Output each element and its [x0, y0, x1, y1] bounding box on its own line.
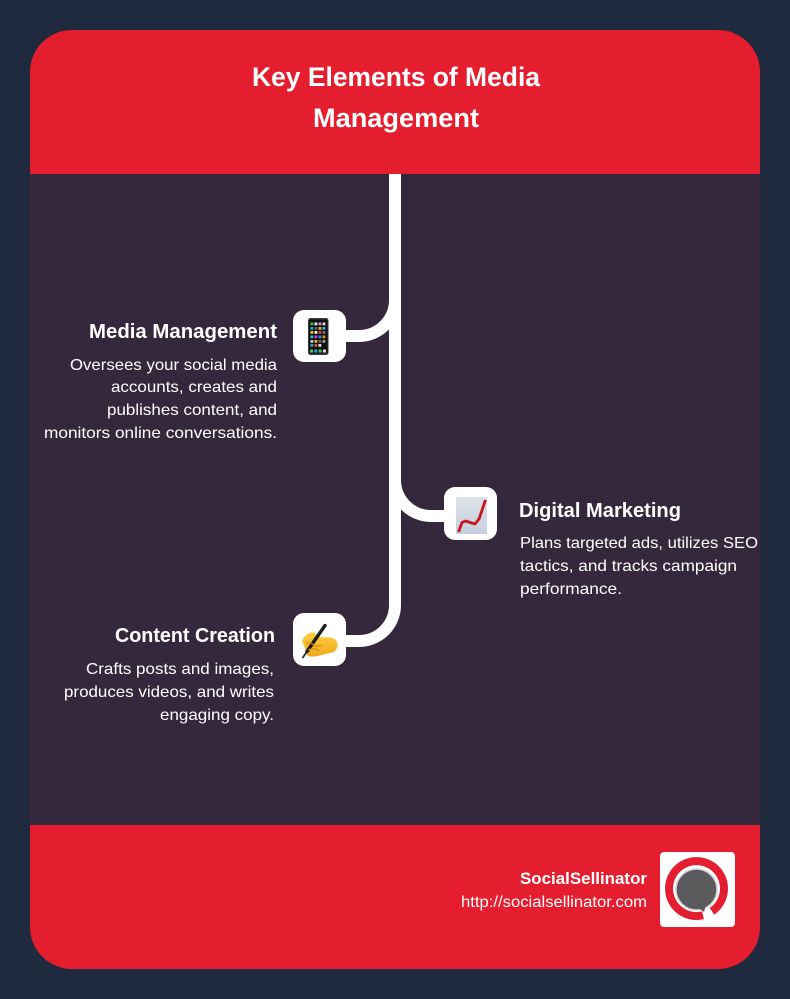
icon: line chart — [444, 487, 497, 540]
timeline connector — [340, 174, 450, 641]
title: Management — [313, 103, 479, 133]
text: Media Management description: monitors online conversations. — [44, 425, 277, 442]
title: Key Elements of Media — [252, 62, 541, 92]
text: Content Creation description — [64, 661, 274, 724]
text: Media Management description: Oversees your social media — [70, 357, 277, 374]
text: Digital Marketing description — [520, 535, 758, 598]
footer brand text: SocialSellinator — [520, 869, 647, 888]
icon: SocialSellinator logo — [660, 852, 735, 927]
text: Digital Marketing description: Plans targeted ads, utilizes SEO — [520, 535, 758, 552]
footer brand text: http://socialsellinator.com — [461, 894, 647, 911]
text: Content Creation description: Crafts posts and images, — [86, 661, 274, 678]
icon: writing hand — [293, 613, 346, 666]
panel: header band — [30, 30, 760, 174]
text: Content Creation description: engaging copy. — [160, 707, 274, 724]
text: Content Creation description: produces videos, and writes — [64, 684, 274, 701]
text: Media Management description: publishes content, and — [107, 402, 277, 419]
heading: Digital Marketing: Digital Marketing — [519, 500, 681, 522]
text: Media Management description: accounts, creates and — [111, 379, 277, 396]
text: Digital Marketing description: performance. — [520, 581, 622, 598]
icon: smartphone — [293, 310, 346, 362]
text: Digital Marketing description: tactics, and tracks campaign — [520, 558, 737, 575]
text: Media Management description — [44, 357, 277, 442]
heading: Content Creation: Content Creation — [115, 625, 275, 647]
footer brand text — [461, 869, 647, 911]
heading: Media Management: Media Management — [89, 321, 277, 343]
title — [252, 62, 541, 133]
panel: footer band — [30, 825, 760, 969]
